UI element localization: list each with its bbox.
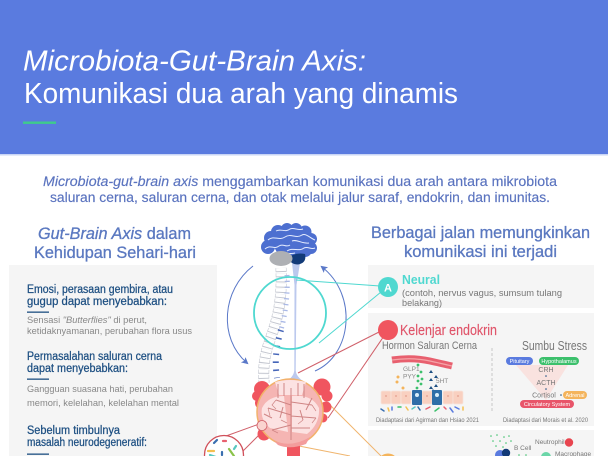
intro text: saluran cerna, saluran cerna, dan otak melalui jalur saraf, endokrin, dan imunitas.: [50, 190, 550, 205]
gut bacteria: [381, 407, 463, 412]
intro text: Microbiota-gut-brain axis menggambarkan komunikasi dua arah antara mikrobiota: [43, 174, 558, 189]
gut magnified circle: [257, 379, 323, 447]
text block: emotions: Sensasi "Butterflies" di perut,: [27, 315, 147, 326]
text block: neurodegenerative: Sebelum timbulnya: [27, 425, 121, 437]
blood vessel: [392, 359, 452, 366]
central body diagram: [204, 223, 384, 456]
text block: digestive problems: Gangguan suasana hati, perubahan: [27, 384, 173, 395]
brain: [261, 223, 317, 266]
text block: emotions: gugup dapat menyebabkan:: [27, 296, 167, 308]
Neutrophil: [535, 438, 573, 447]
intro text: [43, 174, 558, 205]
epithelial cells: [381, 391, 463, 404]
panel: immune: [368, 430, 594, 456]
immune connectors: [299, 405, 382, 456]
pill: Hypothalamus: Hypothalamus: [541, 359, 577, 365]
text block: emotions: [27, 284, 192, 337]
gut hormones diagram: PYY: [403, 374, 417, 380]
text block: digestive problems: dapat menyebabkan:: [27, 363, 128, 375]
gut hormones diagram: [376, 340, 479, 424]
text block: emotions: ketidaknyamanan, perubahan flora usus: [27, 326, 192, 337]
B cell: [495, 445, 532, 456]
header banner: [0, 0, 608, 156]
text block: digestive problems: Permasalahan saluran cerna: [27, 351, 163, 363]
pill: Circulatory System: Circulatory System: [524, 402, 570, 408]
title: [23, 46, 458, 110]
microbe circle: [204, 436, 244, 456]
Neutrophil: Neutrophil: [535, 439, 565, 446]
right heading: [371, 223, 590, 261]
gut hormones diagram: Diadaptasi dari Agirman dan Hsiao 2021: [376, 417, 479, 424]
gut hormones diagram: Hormon Saluran Cerna: [382, 340, 478, 352]
text block: emotions: Emosi, perasaan gembira, atau: [27, 284, 173, 296]
left heading: Kehidupan Sehari-hari: [34, 243, 196, 262]
panel: neural: belakang): [402, 298, 442, 309]
colon: [252, 378, 332, 456]
badge A: A: [384, 282, 392, 294]
stress axis diagram: ACTH: [536, 380, 556, 387]
badge A: [378, 277, 398, 297]
badge endocrine: [378, 320, 398, 340]
text block: digestive problems: [27, 351, 179, 409]
title: Komunikasi dua arah yang dinamis: [24, 78, 458, 110]
spine: [264, 268, 287, 383]
panel: neural: Neural: [402, 272, 440, 287]
immune cell dots: [490, 434, 527, 456]
hormone dots: [416, 364, 423, 389]
neural circle and connectors: [254, 277, 381, 349]
stress axis diagram: [503, 339, 588, 424]
title: Microbiota-Gut-Brain Axis:: [23, 46, 366, 78]
pill: Adrenal: Adrenal: [566, 393, 584, 399]
right heading: Berbagai jalan memungkinkan: [371, 223, 590, 242]
text block: neurodegenerative: masalah neurodegeneratif:: [27, 437, 147, 449]
badge immune: [378, 454, 398, 456]
left heading: Gut-Brain Axis dalam: [38, 224, 191, 243]
gut hormones diagram: 5HT: [436, 378, 448, 385]
panel: everyday life: [9, 265, 217, 456]
gut hormones diagram: GLP1: [403, 366, 420, 373]
spinal cord: [282, 263, 308, 384]
B cell: B Cell: [514, 445, 532, 452]
panel: endocrine: [368, 313, 594, 426]
pill: Pituitary: Pituitary: [510, 359, 530, 365]
right heading: komunikasi ini terjadi: [404, 242, 557, 261]
text block: neurodegenerative: [27, 425, 147, 455]
panel: neural: (contoh, nervus vagus, sumsum tulang: [402, 288, 562, 299]
endocrine connectors: [226, 331, 384, 451]
text block: digestive problems: memori, kelelahan, kelelahan mental: [27, 398, 179, 409]
stress axis diagram: CRH: [538, 367, 554, 374]
sampling circle: [257, 420, 267, 430]
stress axis diagram: Sumbu Stress: [522, 339, 587, 353]
left heading: [34, 224, 196, 262]
arrow: gut to brain: [315, 267, 346, 371]
panel: endocrine: Kelenjar endokrin: [400, 322, 497, 339]
arrow: brain to gut: [227, 266, 253, 363]
panel: neural: [368, 265, 594, 309]
stress axis diagram: Cortisol: [532, 392, 556, 400]
stress axis diagram: Diadaptasi dari Morais et al. 2020: [503, 417, 588, 424]
